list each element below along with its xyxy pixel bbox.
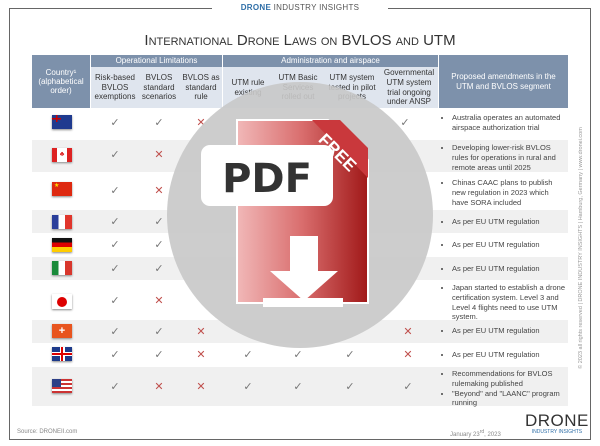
text: As per EU UTM regulation bbox=[452, 326, 540, 335]
text: ✕ bbox=[154, 295, 164, 307]
text: ✓ bbox=[154, 117, 164, 129]
text: UTM system tested in pilot projects bbox=[328, 73, 376, 101]
text: ✓ bbox=[110, 117, 120, 129]
text: ✓ bbox=[110, 295, 120, 307]
text: ✓ bbox=[293, 381, 303, 393]
icon: PDF download bbox=[201, 119, 369, 307]
text: ✓ bbox=[154, 326, 164, 338]
text: "Beyond" and "LAANC" program running bbox=[452, 388, 560, 407]
text: ✕ bbox=[196, 381, 206, 393]
text: As per EU UTM regulation bbox=[452, 240, 540, 249]
text: UTM rule existing bbox=[232, 78, 264, 96]
text: Proposed amendments in the bbox=[451, 72, 556, 81]
text: ✓ bbox=[403, 381, 413, 393]
text: ✓ bbox=[110, 381, 120, 393]
overlay circle bbox=[167, 82, 433, 348]
text: ✓ bbox=[154, 239, 164, 251]
text: Risk-based BVLOS exemptions bbox=[95, 73, 135, 101]
text: ✓ bbox=[110, 216, 120, 228]
brand header: DRONE INDUSTRY INSIGHTS bbox=[241, 3, 359, 12]
text: ✓ bbox=[110, 239, 120, 251]
flags bbox=[52, 115, 72, 129]
table header bbox=[32, 55, 568, 108]
amendments text bbox=[441, 113, 565, 407]
text: ✕ bbox=[196, 326, 206, 338]
text: As per EU UTM regulation bbox=[452, 350, 540, 359]
date: January 23rd, 2023 bbox=[450, 429, 501, 438]
text: BVLOS as standard rule bbox=[182, 73, 220, 101]
text: ✓ bbox=[110, 149, 120, 161]
title: International Drone Laws on BVLOS and UTM bbox=[144, 32, 456, 49]
text: Japan started to establish a drone certification system. Level 3 and Level 4 flights need to use UTM system. bbox=[452, 283, 565, 321]
text: Developing lower-risk BVLOS rules for operations in rural and remote areas until 2025 bbox=[452, 143, 556, 172]
text: ✓ bbox=[110, 326, 120, 338]
text: Operational Limitations bbox=[116, 56, 197, 65]
text: ✕ bbox=[403, 349, 413, 361]
text: Governmental UTM system trial ongoing under ANSP bbox=[384, 68, 434, 106]
text: Administration and airspace bbox=[281, 56, 380, 65]
text: ✕ bbox=[196, 117, 206, 129]
text: UTM and BVLOS segment bbox=[456, 82, 551, 90]
table body: ★ bbox=[54, 183, 59, 189]
text: ✓ bbox=[154, 216, 164, 228]
text: ✕ bbox=[154, 381, 164, 393]
icon: PDF download: PDF bbox=[222, 156, 312, 202]
text: As per EU UTM regulation bbox=[452, 217, 540, 226]
text: Chinas CAAC plans to publish new regulation in 2023 which have SORA included bbox=[452, 178, 552, 206]
text: ✕ bbox=[403, 326, 413, 338]
text: ✓ bbox=[110, 263, 120, 275]
text: ✓ bbox=[345, 381, 355, 393]
text: ✓ bbox=[154, 349, 164, 361]
marks bbox=[110, 117, 413, 393]
text: As per EU UTM regulation bbox=[452, 264, 540, 273]
text: BVLOS standard scenarios bbox=[142, 73, 176, 101]
logo: INDUSTRY INSIGHTS bbox=[532, 429, 582, 435]
text: ✕ bbox=[154, 149, 164, 161]
text: (alphabetical bbox=[38, 77, 84, 86]
text: ✕ bbox=[154, 185, 164, 197]
text: ✓ bbox=[110, 185, 120, 197]
text: Country¹ bbox=[46, 68, 76, 77]
text: Recommendations for BVLOS rulemaking published bbox=[452, 369, 552, 388]
text: ✓ bbox=[243, 349, 253, 361]
text: ✓ bbox=[345, 349, 355, 361]
text: ✓ bbox=[400, 117, 410, 129]
text: ✕ bbox=[196, 349, 206, 361]
icon: PDF download: FREE bbox=[315, 130, 360, 175]
brand header bbox=[212, 3, 388, 12]
side vertical text: © 2023 all rights reserved | DRONE INDUSTRY INSIGHTS | Hamburg, Germany | www.dronei.com bbox=[578, 127, 584, 369]
logo: DRONE bbox=[525, 411, 589, 430]
text: UTM Basic Services rolled out bbox=[278, 73, 318, 101]
table body: + bbox=[59, 325, 65, 337]
text: ✓ bbox=[154, 263, 164, 275]
text: ✓ bbox=[243, 381, 253, 393]
text: Australia operates an automated airspace authorization trial bbox=[452, 113, 560, 132]
text: ✓ bbox=[293, 349, 303, 361]
table body: ♣ bbox=[60, 151, 64, 158]
source: Source: DRONEII.com bbox=[17, 429, 77, 435]
text: order) bbox=[50, 86, 72, 95]
text: ✓ bbox=[110, 349, 120, 361]
